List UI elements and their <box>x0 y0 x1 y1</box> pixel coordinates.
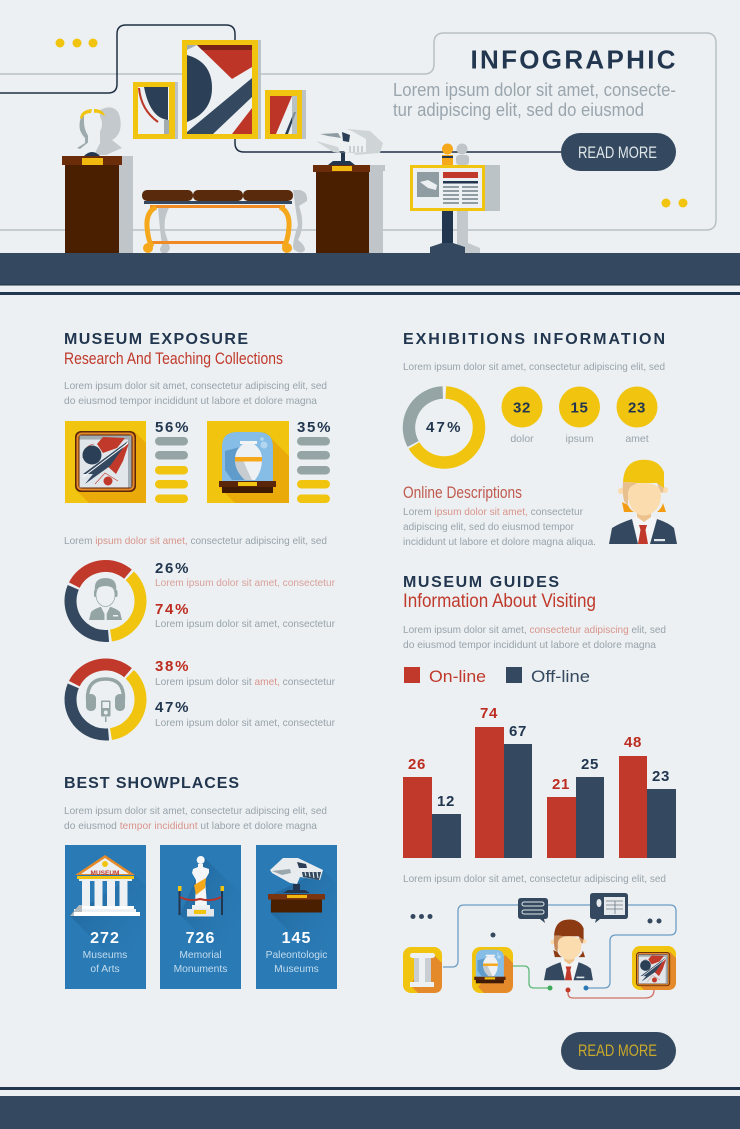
caption above donuts: Lorem ipsum dolor sit amet, consectetur adipiscing elit, sed <box>64 535 327 547</box>
card: paleontologic museums <box>256 845 337 989</box>
subheading: information about visiting: Information About Visiting <box>403 591 596 612</box>
heading: museum guides: MUSEUM GUIDES <box>403 574 559 591</box>
donut chart: audio guides <box>56 650 155 749</box>
bar chart: 26 <box>408 756 426 773</box>
stat: 35 percent <box>297 419 331 503</box>
stat circle: 23 amet <box>616 386 658 445</box>
speech bubble left <box>518 898 548 923</box>
paragraph: online descriptions: Lorem ipsum dolor sit amet, consectetur <box>403 506 583 518</box>
card: museums of arts: MUSEUM <box>91 870 119 877</box>
icon: headphones and player <box>86 679 125 722</box>
diagram: guide network <box>403 893 676 998</box>
paragraph: exhibitions: Lorem ipsum dolor sit amet, consectetur adipiscing elit, sed <box>403 361 665 373</box>
paragraph: online descriptions: adipiscing elit, sed do eiusmod tempor <box>403 521 574 533</box>
label: paleontologic museums: Museums <box>274 964 319 975</box>
paragraph: museum guides: do eiusmod tempor incididunt ut labore et dolore magna <box>403 639 656 651</box>
stat: 56 percent <box>155 419 189 503</box>
stat: 26 percent: 26% <box>155 560 189 577</box>
donut chart: visitors <box>56 552 155 650</box>
chart legend: Off-line <box>531 667 590 686</box>
stat circle: 15 ipsum: ipsum <box>565 433 594 445</box>
bar chart: 74 <box>480 705 498 722</box>
stat: 26 percent: Lorem ipsum dolor sit amet, consectetur <box>155 577 335 589</box>
icon: man in suit <box>89 578 122 620</box>
label: memorial monuments: Memorial <box>179 950 222 961</box>
donut chart: 47 percent: 47% <box>426 419 461 436</box>
chart legend: On-line <box>429 667 486 686</box>
label: museums of arts: Museums <box>83 950 127 961</box>
connector end dots <box>548 986 588 992</box>
header description: tur adipiscing elit, sed do eiusmod <box>393 100 644 120</box>
panel: museum guides <box>403 574 676 885</box>
label: museums of arts <box>83 950 127 975</box>
stat: 35 percent: 35% <box>297 419 331 436</box>
bench <box>142 190 307 253</box>
stat: 26 percent <box>155 560 335 589</box>
decorative dots left <box>56 38 98 48</box>
paragraph: museum guides <box>403 624 666 651</box>
stat: 74 percent: 74% <box>155 601 189 618</box>
tile: vase <box>472 947 513 993</box>
bar chart: 23 <box>652 768 670 785</box>
paragraph: museum exposure: do eiusmod tempor incididunt ut labore et dolore magna <box>64 395 317 407</box>
label: memorial monuments <box>174 950 227 975</box>
label: paleontologic museums: Paleontologic <box>266 950 327 961</box>
stat: 47 percent <box>155 699 335 729</box>
bar chart: 21 <box>552 776 570 793</box>
header outline box <box>0 33 716 230</box>
paragraph: museum guides: Lorem ipsum dolor sit amet, consectetur adipiscing elit, sed <box>403 624 666 636</box>
stat: 56 percent: 56% <box>155 419 189 436</box>
connector lines <box>443 905 676 998</box>
footer band <box>0 1087 740 1129</box>
tile: column <box>403 947 442 993</box>
stat circle: 32 dolor <box>502 386 542 445</box>
information stand <box>410 144 500 253</box>
stat circle: 32 dolor: dolor <box>510 433 534 445</box>
number: 145: 145 <box>282 930 311 947</box>
card: museums of arts <box>65 845 146 989</box>
main title: INFOGRAPHIC <box>470 44 676 74</box>
stat circle: 15 ipsum: 15 <box>571 400 588 416</box>
paragraph: best showplaces <box>64 805 327 832</box>
heading: best showplaces: BEST SHOWPLACES <box>64 775 239 792</box>
header floor band <box>0 253 740 295</box>
skull on pedestal <box>313 129 385 253</box>
panel: museum exposure <box>56 331 335 749</box>
heading: exhibitions information: EXHIBITIONS INFORMATION <box>403 331 665 348</box>
tile: painting <box>632 946 676 990</box>
stat: 38 percent <box>155 658 335 688</box>
paragraph: online descriptions <box>403 506 596 548</box>
speech bubble right <box>590 893 628 923</box>
bar chart: 25 <box>581 756 599 773</box>
label: memorial monuments: Monuments <box>174 964 227 975</box>
icon tile: painting <box>65 421 146 503</box>
read more button top: READ MORE <box>578 143 657 162</box>
chart legend <box>404 667 590 686</box>
read more button bottom <box>561 1032 676 1070</box>
icon: guide person <box>544 920 593 980</box>
panel: best showplaces <box>64 775 337 989</box>
paragraph: best showplaces: do eiusmod tempor incididunt ut labore et dolore magna <box>64 820 317 832</box>
stat circle: 15 ipsum <box>559 386 600 445</box>
subheading: research and teaching: Research And Teaching Collections <box>64 349 283 368</box>
header description <box>393 80 676 120</box>
paragraph: best showplaces: Lorem ipsum dolor sit amet, consectetur adipiscing elit, sed <box>64 805 327 817</box>
paragraph: museum exposure: Lorem ipsum dolor sit amet, consectetur adipiscing elit, sed <box>64 380 327 392</box>
stat: 38 percent: 38% <box>155 658 189 675</box>
stat: 74 percent <box>155 601 335 630</box>
small framed painting left <box>133 82 178 139</box>
stat: 47 percent: Lorem ipsum dolor sit amet, consectetur <box>155 717 335 729</box>
bar chart <box>403 705 676 858</box>
header connector line <box>0 25 561 152</box>
large framed painting <box>182 40 261 139</box>
small framed painting right <box>265 90 306 139</box>
label: museums of arts: of Arts <box>90 964 120 975</box>
read more button bottom: READ MORE <box>578 1041 657 1060</box>
stat: 47 percent: 47% <box>155 699 189 716</box>
stat circle: 32 dolor: 32 <box>513 400 531 416</box>
icon tile: vase <box>207 421 289 503</box>
subheading: online descriptions: Online Descriptions <box>403 483 522 502</box>
paragraph: online descriptions: incididunt ut labore et dolore magna aliqua. <box>403 536 596 548</box>
bar chart: 48 <box>624 734 642 751</box>
number: 726: 726 <box>186 930 215 947</box>
paragraph: museum exposure <box>64 380 327 407</box>
bust on pedestal <box>62 107 133 253</box>
decorative dots right <box>662 198 688 208</box>
stat circle: 23 amet: 23 <box>628 400 646 416</box>
card: memorial monuments <box>160 845 241 989</box>
bar chart: 12 <box>437 793 455 810</box>
number: 272: 272 <box>90 930 120 947</box>
donut chart: 47 percent <box>397 380 491 475</box>
dark dots <box>410 914 662 938</box>
panel: exhibitions information <box>397 331 677 548</box>
icon: woman guide <box>609 460 677 544</box>
read more button top <box>561 133 676 171</box>
stat: 74 percent: Lorem ipsum dolor sit amet, consectetur <box>155 618 335 630</box>
caption below chart: Lorem ipsum dolor sit amet, consectetur adipiscing elit, sed <box>403 873 666 885</box>
bar chart: 67 <box>509 723 527 740</box>
stat circle: 23 amet: amet <box>625 433 649 445</box>
stat: 38 percent: Lorem ipsum dolor sit amet, consectetur <box>155 676 335 688</box>
heading: museum exposure: MUSEUM EXPOSURE <box>64 331 248 348</box>
header description: Lorem ipsum dolor sit amet, consecte- <box>393 80 676 100</box>
label: paleontologic museums <box>266 950 327 975</box>
